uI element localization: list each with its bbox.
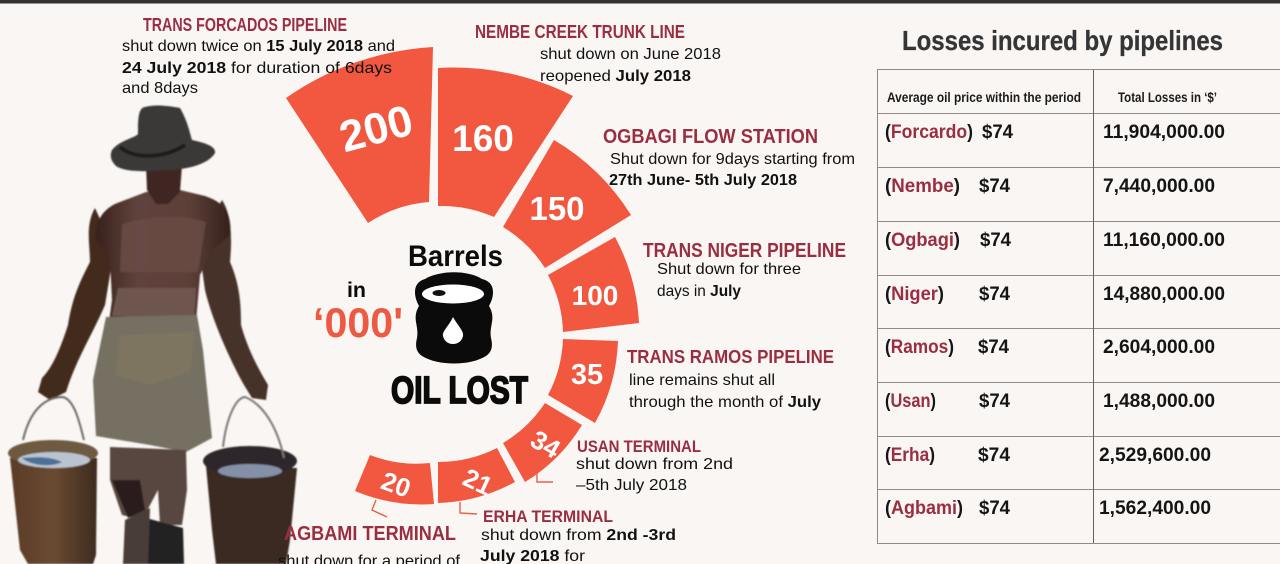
row: ogbagi: 11,160,000.00 <box>1103 230 1225 251</box>
photo: man carrying two buckets <box>8 105 297 564</box>
row: forcardo: $74 <box>982 122 1013 143</box>
row: ramos: $74 <box>978 337 1009 358</box>
table: losses by pipeline <box>878 70 1280 544</box>
callout: trans ramos: through the month of July <box>629 394 821 411</box>
row: erha: $74 <box>978 445 1010 466</box>
segment 20 <box>355 455 434 504</box>
callout: erha <box>480 507 676 564</box>
value 200: 200 <box>334 96 418 162</box>
centre label: oil lost <box>313 240 528 412</box>
value 21: 21 <box>458 462 497 502</box>
row: agbami: $74 <box>979 498 1010 519</box>
row: usan: (Usan) <box>885 391 936 412</box>
callout: trans niger <box>643 240 846 300</box>
segment 200 <box>286 47 433 223</box>
row: niger: (Niger) <box>885 284 944 305</box>
value 34: 34 <box>525 424 566 465</box>
value 100: 100 <box>572 280 618 311</box>
row: ogbagi: $74 <box>980 230 1011 251</box>
callout: trans forcados: 24 July 2018 for duration of 6days <box>122 60 392 77</box>
callout: usan: USAN TERMINAL <box>577 437 701 456</box>
left bucket <box>10 458 97 564</box>
callout: nembe creek: shut down on June 2018 <box>540 46 721 63</box>
row: ogbagi <box>885 230 1225 251</box>
row: erha: 2,529,600.00 <box>1099 445 1211 466</box>
value 150: 150 <box>529 190 585 227</box>
right arm <box>198 200 268 400</box>
row: forcardo <box>885 122 1225 143</box>
callout: usan: –5th July 2018 <box>576 477 687 494</box>
callout: trans ramos: line remains shut all <box>629 372 775 389</box>
value 35: 35 <box>571 359 603 391</box>
callout: ogbagi: 27th June- 5th July 2018 <box>609 172 797 189</box>
row: agbami: 1,562,400.00 <box>1099 498 1211 519</box>
row: erha: (Erha) <box>885 445 935 466</box>
label: thousands: ‘000' <box>313 299 403 346</box>
row: nembe: 7,440,000.00 <box>1103 176 1215 197</box>
connector: usan <box>537 473 553 482</box>
callout: trans forcados <box>122 15 395 97</box>
segment 35 <box>548 339 618 423</box>
row: nembe: $74 <box>979 176 1010 197</box>
value 160: 160 <box>452 118 514 159</box>
callout: nembe creek: reopened July 2018 <box>540 68 691 85</box>
callout: agbami: AGBAMI TERMINAL <box>284 523 456 545</box>
label: oil lost: OIL LOST <box>391 370 528 412</box>
row: usan: $74 <box>979 391 1010 412</box>
segment 160 <box>438 68 573 217</box>
row: forcardo: 11,904,000.00 <box>1103 122 1225 143</box>
callout: trans niger: TRANS NIGER PIPELINE <box>643 240 846 262</box>
callout: usan: shut down from 2nd <box>576 456 733 473</box>
connector: erha <box>460 502 477 514</box>
callout: trans forcados: shut down twice on 15 July 2018 and <box>122 38 395 55</box>
face <box>146 165 182 204</box>
callout: ogbagi <box>603 126 855 189</box>
boots <box>146 518 184 564</box>
row: forcardo: (Forcardo) <box>885 122 973 143</box>
segment 34 <box>503 403 582 482</box>
right bucket <box>206 466 297 564</box>
abdomen <box>112 288 196 318</box>
callout: trans niger: days in July <box>657 283 741 300</box>
row: usan <box>885 391 1215 412</box>
callout: ogbagi: OGBAGI FLOW STATION <box>603 126 818 148</box>
segment 21 <box>438 448 515 503</box>
row: erha <box>885 445 1211 466</box>
connector: agbami <box>372 500 387 517</box>
shorts <box>93 315 212 452</box>
row: ramos: (Ramos) <box>885 337 954 358</box>
table header <box>887 89 1217 105</box>
legs <box>110 447 187 525</box>
row: agbami <box>885 498 1211 519</box>
callout: ogbagi: Shut down for 9days starting from <box>610 151 855 168</box>
table header: Average oil price within the period <box>887 89 1081 105</box>
callout: erha: ERHA TERMINAL <box>483 507 613 526</box>
shorts shading <box>115 332 195 385</box>
callout: trans ramos <box>627 347 834 411</box>
hat <box>111 105 215 171</box>
label: in: in <box>347 279 366 302</box>
icon: oil barrel <box>415 272 493 364</box>
row: agbami: (Agbami) <box>885 498 963 519</box>
left arm <box>38 208 114 400</box>
callout: erha: shut down from 2nd -3rd <box>481 527 676 544</box>
row: niger <box>885 284 1225 305</box>
chest highlight <box>120 217 206 272</box>
callout: trans forcados: TRANS FORCADOS PIPELINE <box>143 15 347 35</box>
row: ramos: 2,604,000.00 <box>1103 337 1215 358</box>
row: usan: 1,488,000.00 <box>1103 391 1215 412</box>
value 20: 20 <box>377 466 415 504</box>
torso <box>96 190 230 322</box>
callout: nembe creek <box>475 22 721 85</box>
heading: losses: Losses incured by pipelines <box>902 25 1223 56</box>
segment 100 <box>548 237 639 332</box>
callout: trans forcados: and 8days <box>122 80 198 97</box>
callout: usan <box>576 437 733 494</box>
row: ogbagi: (Ogbagi) <box>885 230 960 251</box>
row: niger: 14,880,000.00 <box>1103 284 1225 305</box>
row: nembe <box>885 176 1215 197</box>
row: niger: $74 <box>979 284 1010 305</box>
row: nembe: (Nembe) <box>885 176 960 197</box>
row: ramos <box>885 337 1215 358</box>
table header: Total Losses in ‘$’ <box>1118 89 1217 105</box>
callout: trans niger: Shut down for three <box>657 261 801 278</box>
segment 150 <box>503 140 631 268</box>
callout: nembe creek: NEMBE CREEK TRUNK LINE <box>475 22 685 42</box>
chart: barrels lost radial segments <box>286 47 639 504</box>
label: barrels: Barrels <box>408 240 503 273</box>
callout: trans ramos: TRANS RAMOS PIPELINE <box>627 347 834 367</box>
callout: agbami <box>278 523 461 564</box>
